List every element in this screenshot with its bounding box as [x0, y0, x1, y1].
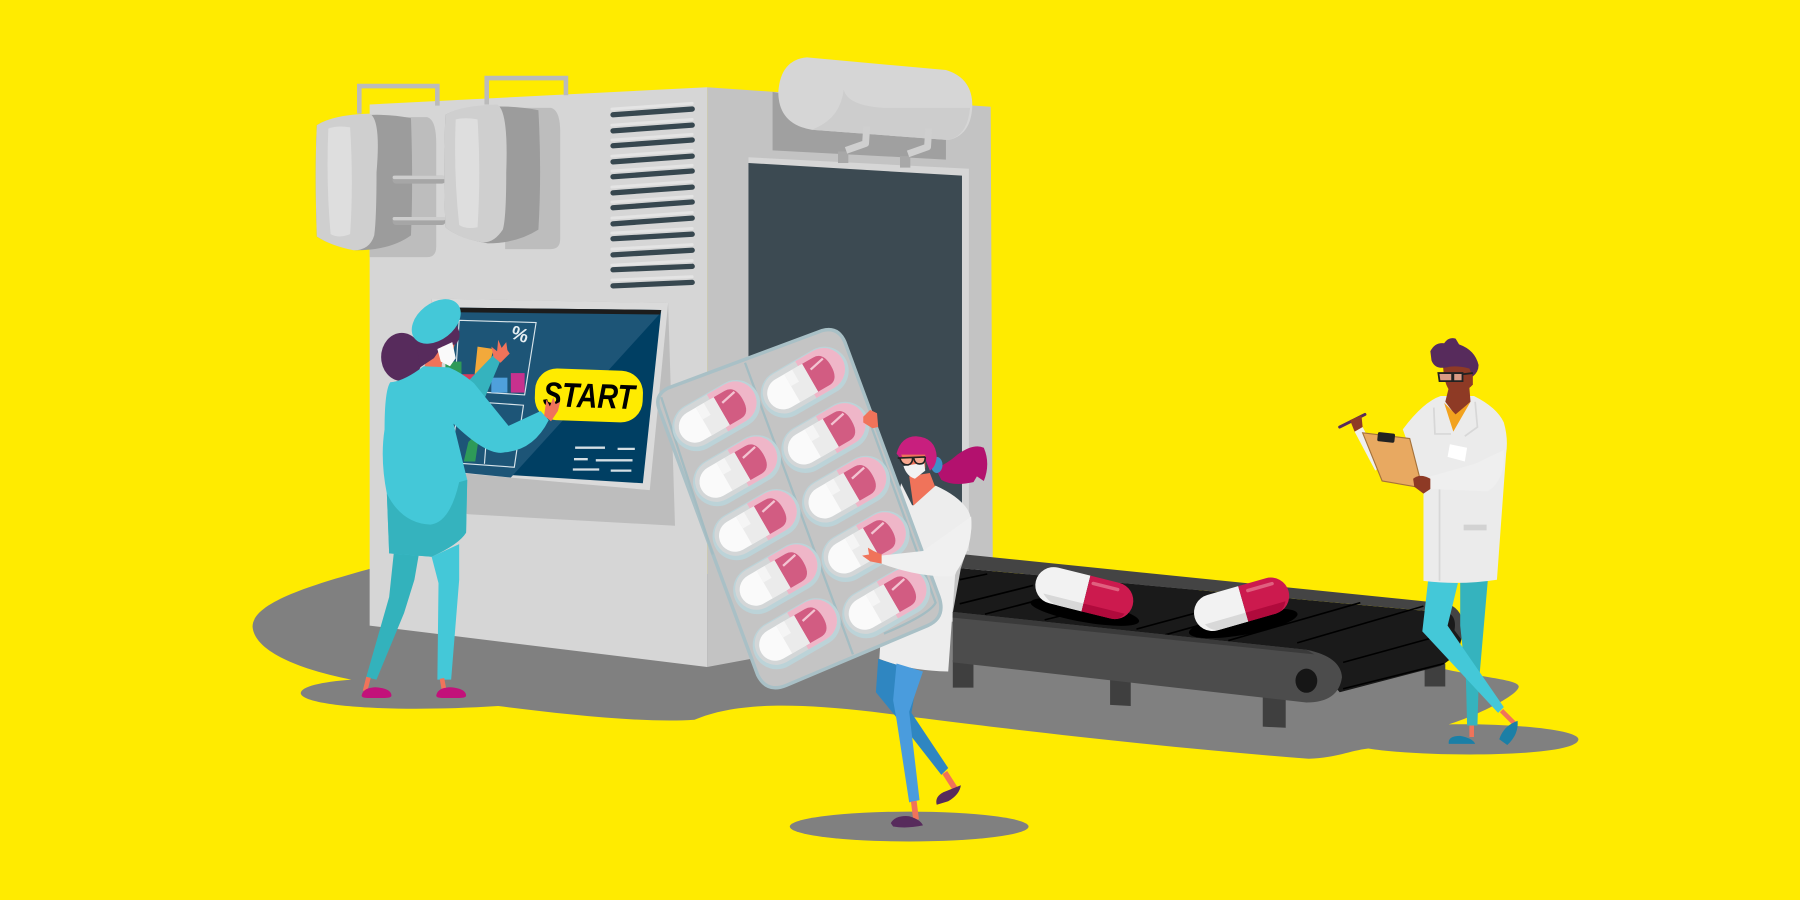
lower hand	[862, 548, 882, 564]
control panel base	[432, 298, 675, 526]
neck and face	[424, 341, 455, 374]
sleeve	[880, 517, 971, 576]
clipboard	[1363, 433, 1422, 488]
far rail	[961, 554, 1463, 639]
back leg	[876, 659, 948, 775]
belt lines	[960, 574, 1444, 689]
conveyor belt	[953, 554, 1463, 728]
glasses	[1438, 373, 1473, 381]
pen	[1340, 414, 1365, 427]
ankles	[365, 677, 444, 691]
face	[901, 455, 925, 468]
scientist with clipboard	[1340, 338, 1518, 745]
pen hand	[1350, 416, 1363, 432]
mask	[437, 342, 456, 366]
sheet	[658, 330, 941, 688]
carrying arm	[862, 410, 971, 576]
right tank	[444, 78, 566, 249]
door	[748, 163, 962, 505]
neck	[1445, 388, 1471, 416]
left leg	[366, 553, 419, 680]
front leg	[893, 664, 923, 802]
hair back	[381, 333, 422, 381]
mask	[903, 463, 925, 479]
front rail	[953, 612, 1342, 703]
shoes	[891, 816, 923, 827]
capsule right	[1190, 573, 1294, 635]
machine	[316, 57, 993, 667]
hair	[897, 436, 937, 471]
door frame	[748, 157, 969, 551]
coat	[1403, 396, 1507, 583]
belt surface	[953, 568, 1462, 692]
front leg	[1422, 581, 1504, 713]
coat shade	[387, 480, 467, 557]
floor shadow	[253, 568, 1578, 759]
holding hand	[1413, 476, 1430, 494]
writing arm	[1355, 427, 1382, 471]
capsule left	[1031, 563, 1137, 623]
shadow under walking technician	[790, 812, 1029, 841]
shoes	[1449, 721, 1518, 745]
pills right column	[752, 338, 858, 427]
technician carrying blister pack	[876, 436, 987, 827]
capsule shadow left	[1029, 592, 1141, 632]
machine side	[707, 87, 993, 667]
ponytail	[936, 446, 987, 484]
blister pack	[658, 330, 941, 688]
lapel lines	[1434, 402, 1477, 581]
near hand	[544, 397, 560, 421]
back legs	[1425, 664, 1445, 686]
start button: START	[542, 376, 638, 417]
ankles	[914, 773, 955, 820]
cap	[403, 290, 469, 353]
machine front	[370, 87, 707, 667]
start button	[534, 368, 644, 423]
clip	[1377, 432, 1395, 443]
right leg	[432, 544, 459, 680]
shirt	[1444, 402, 1471, 432]
top tank	[773, 57, 972, 168]
vents	[612, 103, 692, 286]
glasses	[898, 457, 925, 465]
ankles	[1472, 711, 1514, 737]
chart panel	[445, 320, 536, 396]
top hand	[863, 410, 878, 428]
back leg	[1460, 581, 1488, 726]
far hand	[491, 340, 510, 363]
pocket	[1464, 525, 1487, 530]
badge	[1448, 444, 1467, 461]
hair	[1430, 338, 1479, 377]
coat	[879, 483, 971, 672]
screen	[442, 308, 661, 483]
hair side	[416, 326, 459, 367]
pills left column	[664, 371, 769, 460]
left tank	[316, 86, 445, 257]
screen bezel	[432, 298, 668, 490]
near sleeve	[1430, 450, 1504, 491]
coat	[383, 366, 549, 557]
operator in teal	[362, 290, 560, 698]
front legs	[953, 660, 973, 688]
far arm	[464, 355, 501, 404]
sheet edge lines	[661, 363, 936, 654]
capsule shadow right	[1187, 602, 1299, 644]
lower chart panel	[450, 401, 523, 467]
roller	[1295, 669, 1317, 693]
shoes	[362, 687, 466, 698]
percent sign: %	[508, 322, 531, 348]
hair tie	[931, 457, 942, 473]
neck	[909, 473, 936, 509]
screen text lines	[573, 448, 635, 471]
face	[1443, 365, 1473, 393]
